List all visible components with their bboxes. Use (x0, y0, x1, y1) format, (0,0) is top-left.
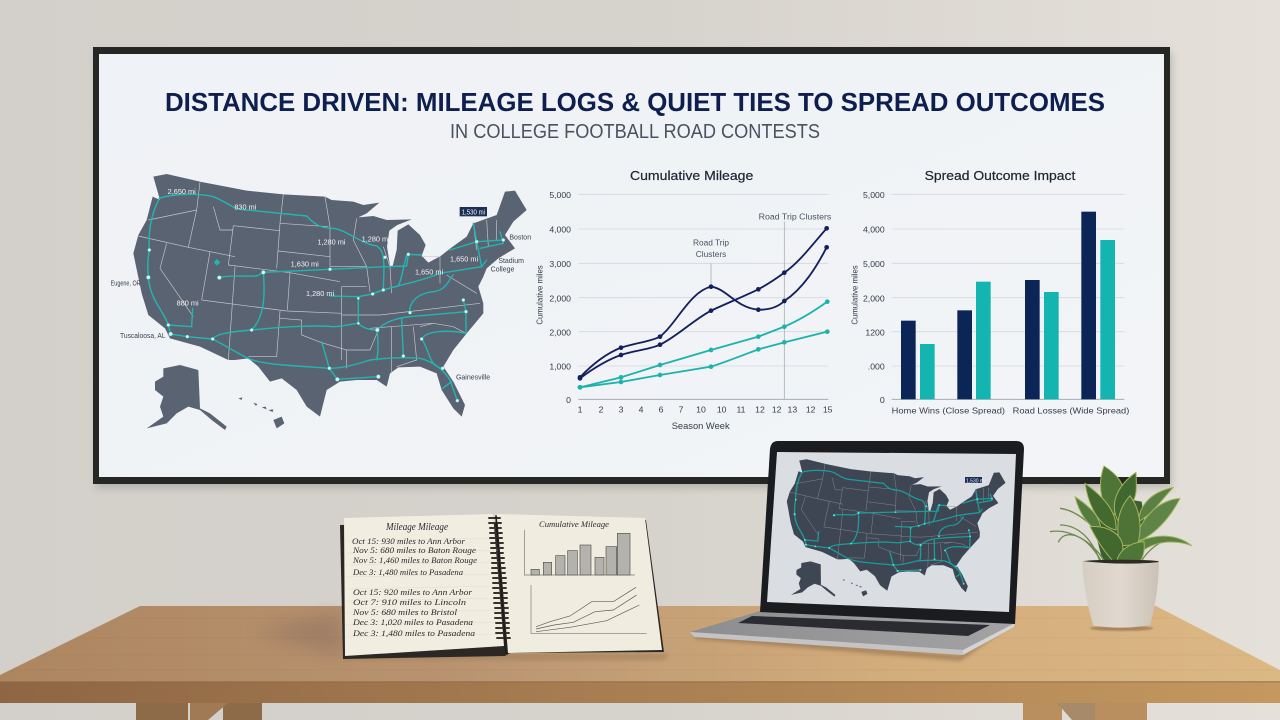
x axis labels (578, 405, 833, 415)
mileage labels: 2,650 mi (168, 187, 196, 196)
handwritten log heading: Mileage Mileage (385, 522, 448, 533)
y axis labels (863, 190, 885, 405)
mileage labels: 1,280 mi (317, 237, 346, 246)
annotation: road trip clusters (693, 212, 831, 399)
y axis labels: 4,000 (863, 225, 885, 235)
mileage labels: 1,630 mi (291, 259, 319, 268)
x axis labels: 2 (599, 405, 604, 415)
x axis labels: 12 (772, 405, 782, 415)
title: DISTANCE DRIVEN: MILEAGE LOGS & QUIET TIES TO SPREAD OUTCOMES (165, 87, 1105, 117)
x axis labels: 12 (755, 405, 765, 415)
laptop screen map (784, 459, 1006, 600)
laptop lid (760, 441, 1024, 624)
leaves (1050, 466, 1192, 563)
laptop map label: 1,530 mi (966, 478, 985, 484)
city labels: Eugene, OR (111, 280, 141, 287)
category labels: Road Losses (Wide Spread) (1013, 405, 1129, 415)
x axis title: Season Week (672, 421, 730, 431)
x axis labels: 13 (788, 405, 797, 415)
pot (1082, 560, 1159, 628)
notebook right page (497, 514, 662, 653)
handwritten entries: Nov 5: 680 miles to Bristol (352, 607, 458, 617)
laptop (690, 441, 1024, 658)
city labels: Stadium (498, 258, 524, 265)
mileage labels: 880 mi (177, 298, 199, 307)
y axis title: Cumulative miles (535, 265, 545, 325)
x axis labels: 11 (736, 405, 746, 415)
potted plant (1050, 466, 1192, 631)
teal series A (578, 299, 830, 390)
y axis labels: 2,000 (549, 293, 571, 303)
notebook left page (344, 514, 504, 656)
handwritten entries: Dec 3: 1,480 miles to Pasadena (352, 628, 476, 638)
handwritten entries (352, 536, 477, 638)
mileage labels: 1,650 mi (415, 267, 443, 276)
x axis labels: 10 (717, 405, 727, 415)
teal series B (578, 329, 830, 390)
y axis labels: 0 (880, 395, 885, 405)
chart heading: Spread Outcome Impact (925, 169, 1076, 183)
city labels: College (491, 267, 514, 274)
y axis labels (549, 190, 571, 405)
annotation: road trip clusters: Road Trip (693, 238, 729, 248)
city labels: Tuscaloosa, AL (120, 333, 166, 340)
x axis labels: 1 (578, 405, 583, 415)
sketched line chart (531, 585, 647, 633)
chart: cumulative mileage line chart (535, 169, 833, 431)
y axis labels: .000 (868, 362, 885, 372)
table (0, 606, 1280, 720)
y axis title: Cumulative miles (849, 265, 859, 325)
callout: mileage box: 1,530 mi (462, 207, 485, 216)
x axis labels: 6 (659, 405, 664, 415)
city labels: Boston (509, 234, 531, 241)
y axis labels: 1200 (865, 327, 885, 337)
x axis labels: 7 (679, 405, 684, 415)
mileage labels: 1,280 mi (362, 234, 390, 243)
handwritten entries: Oct 15: 920 miles to Ann Arbor (353, 587, 473, 597)
state borders (138, 182, 497, 373)
mileage labels (168, 187, 478, 307)
laptop base (690, 611, 1015, 655)
chart: spread outcome impact bar chart (849, 169, 1129, 415)
handwritten entries: Nov 5: 1,460 miles to Baton Rouge (352, 555, 477, 565)
y axis labels: 5,000 (863, 190, 885, 200)
spiral binding (489, 516, 510, 653)
panel: US travel route map (111, 174, 531, 430)
bars: road losses wide spread (1025, 212, 1115, 399)
handwritten entries: Oct 15: 930 miles to Ann Arbor (352, 536, 466, 546)
x axis labels: 12 (806, 405, 816, 415)
y axis labels: 1,000 (549, 362, 571, 372)
bars: home wins close spread (901, 282, 991, 399)
x axis labels: 4 (639, 405, 644, 415)
y axis labels: 2,000 (549, 327, 571, 337)
y axis labels: 5,000 (549, 190, 571, 200)
annotation: road trip clusters: Clusters (696, 249, 726, 259)
laptop screen (767, 452, 1016, 612)
route stops (146, 238, 505, 402)
map land (133, 174, 527, 430)
x axis labels: 3 (619, 405, 624, 415)
mileage labels: 830 mi (234, 202, 257, 211)
plant shadow on table (1090, 626, 1153, 631)
y axis labels: 2,000 (863, 293, 885, 303)
handwritten entries: Dec 3: 1,480 miles to Pasadena (352, 567, 464, 577)
mileage labels: 1,280 mi (306, 289, 334, 298)
city labels (111, 234, 531, 381)
y axis labels: 4,000 (549, 225, 571, 235)
y axis labels: 5,000 (863, 259, 885, 269)
handwritten entries: Dec 3: 1,020 miles to Pasadena (352, 617, 474, 627)
y axis labels: 0 (566, 395, 571, 405)
annotation: road trip clusters: Road Trip Clusters (759, 212, 831, 222)
category labels: Home Wins (Close Spread) (892, 405, 1005, 415)
x axis labels: 10 (696, 405, 706, 415)
wall-mounted display (93, 47, 1172, 488)
notebook heading: Cumulative Mileage (539, 519, 609, 529)
category labels (892, 405, 1129, 415)
city labels: Gainesville (456, 374, 490, 381)
sketched bar chart (524, 530, 635, 575)
grid lines (892, 194, 1124, 366)
notebook (340, 514, 668, 660)
navy series A (578, 245, 829, 380)
handwritten entries: Oct 7: 910 miles to Lincoln (353, 597, 467, 607)
handwritten entries: Nov 5: 680 miles to Baton Rouge (352, 545, 476, 555)
subtitle: IN COLLEGE FOOTBALL ROAD CONTESTS (450, 121, 820, 143)
y axis labels: 3,000 (549, 259, 571, 269)
team travel routes (148, 194, 503, 401)
icon: diamond marker (214, 259, 220, 266)
x axis labels: 15 (823, 405, 833, 415)
mileage labels: 1,650 mi (450, 254, 478, 263)
chart heading: Cumulative Mileage (630, 169, 753, 183)
grid lines (578, 194, 828, 366)
navy series B (578, 226, 829, 381)
